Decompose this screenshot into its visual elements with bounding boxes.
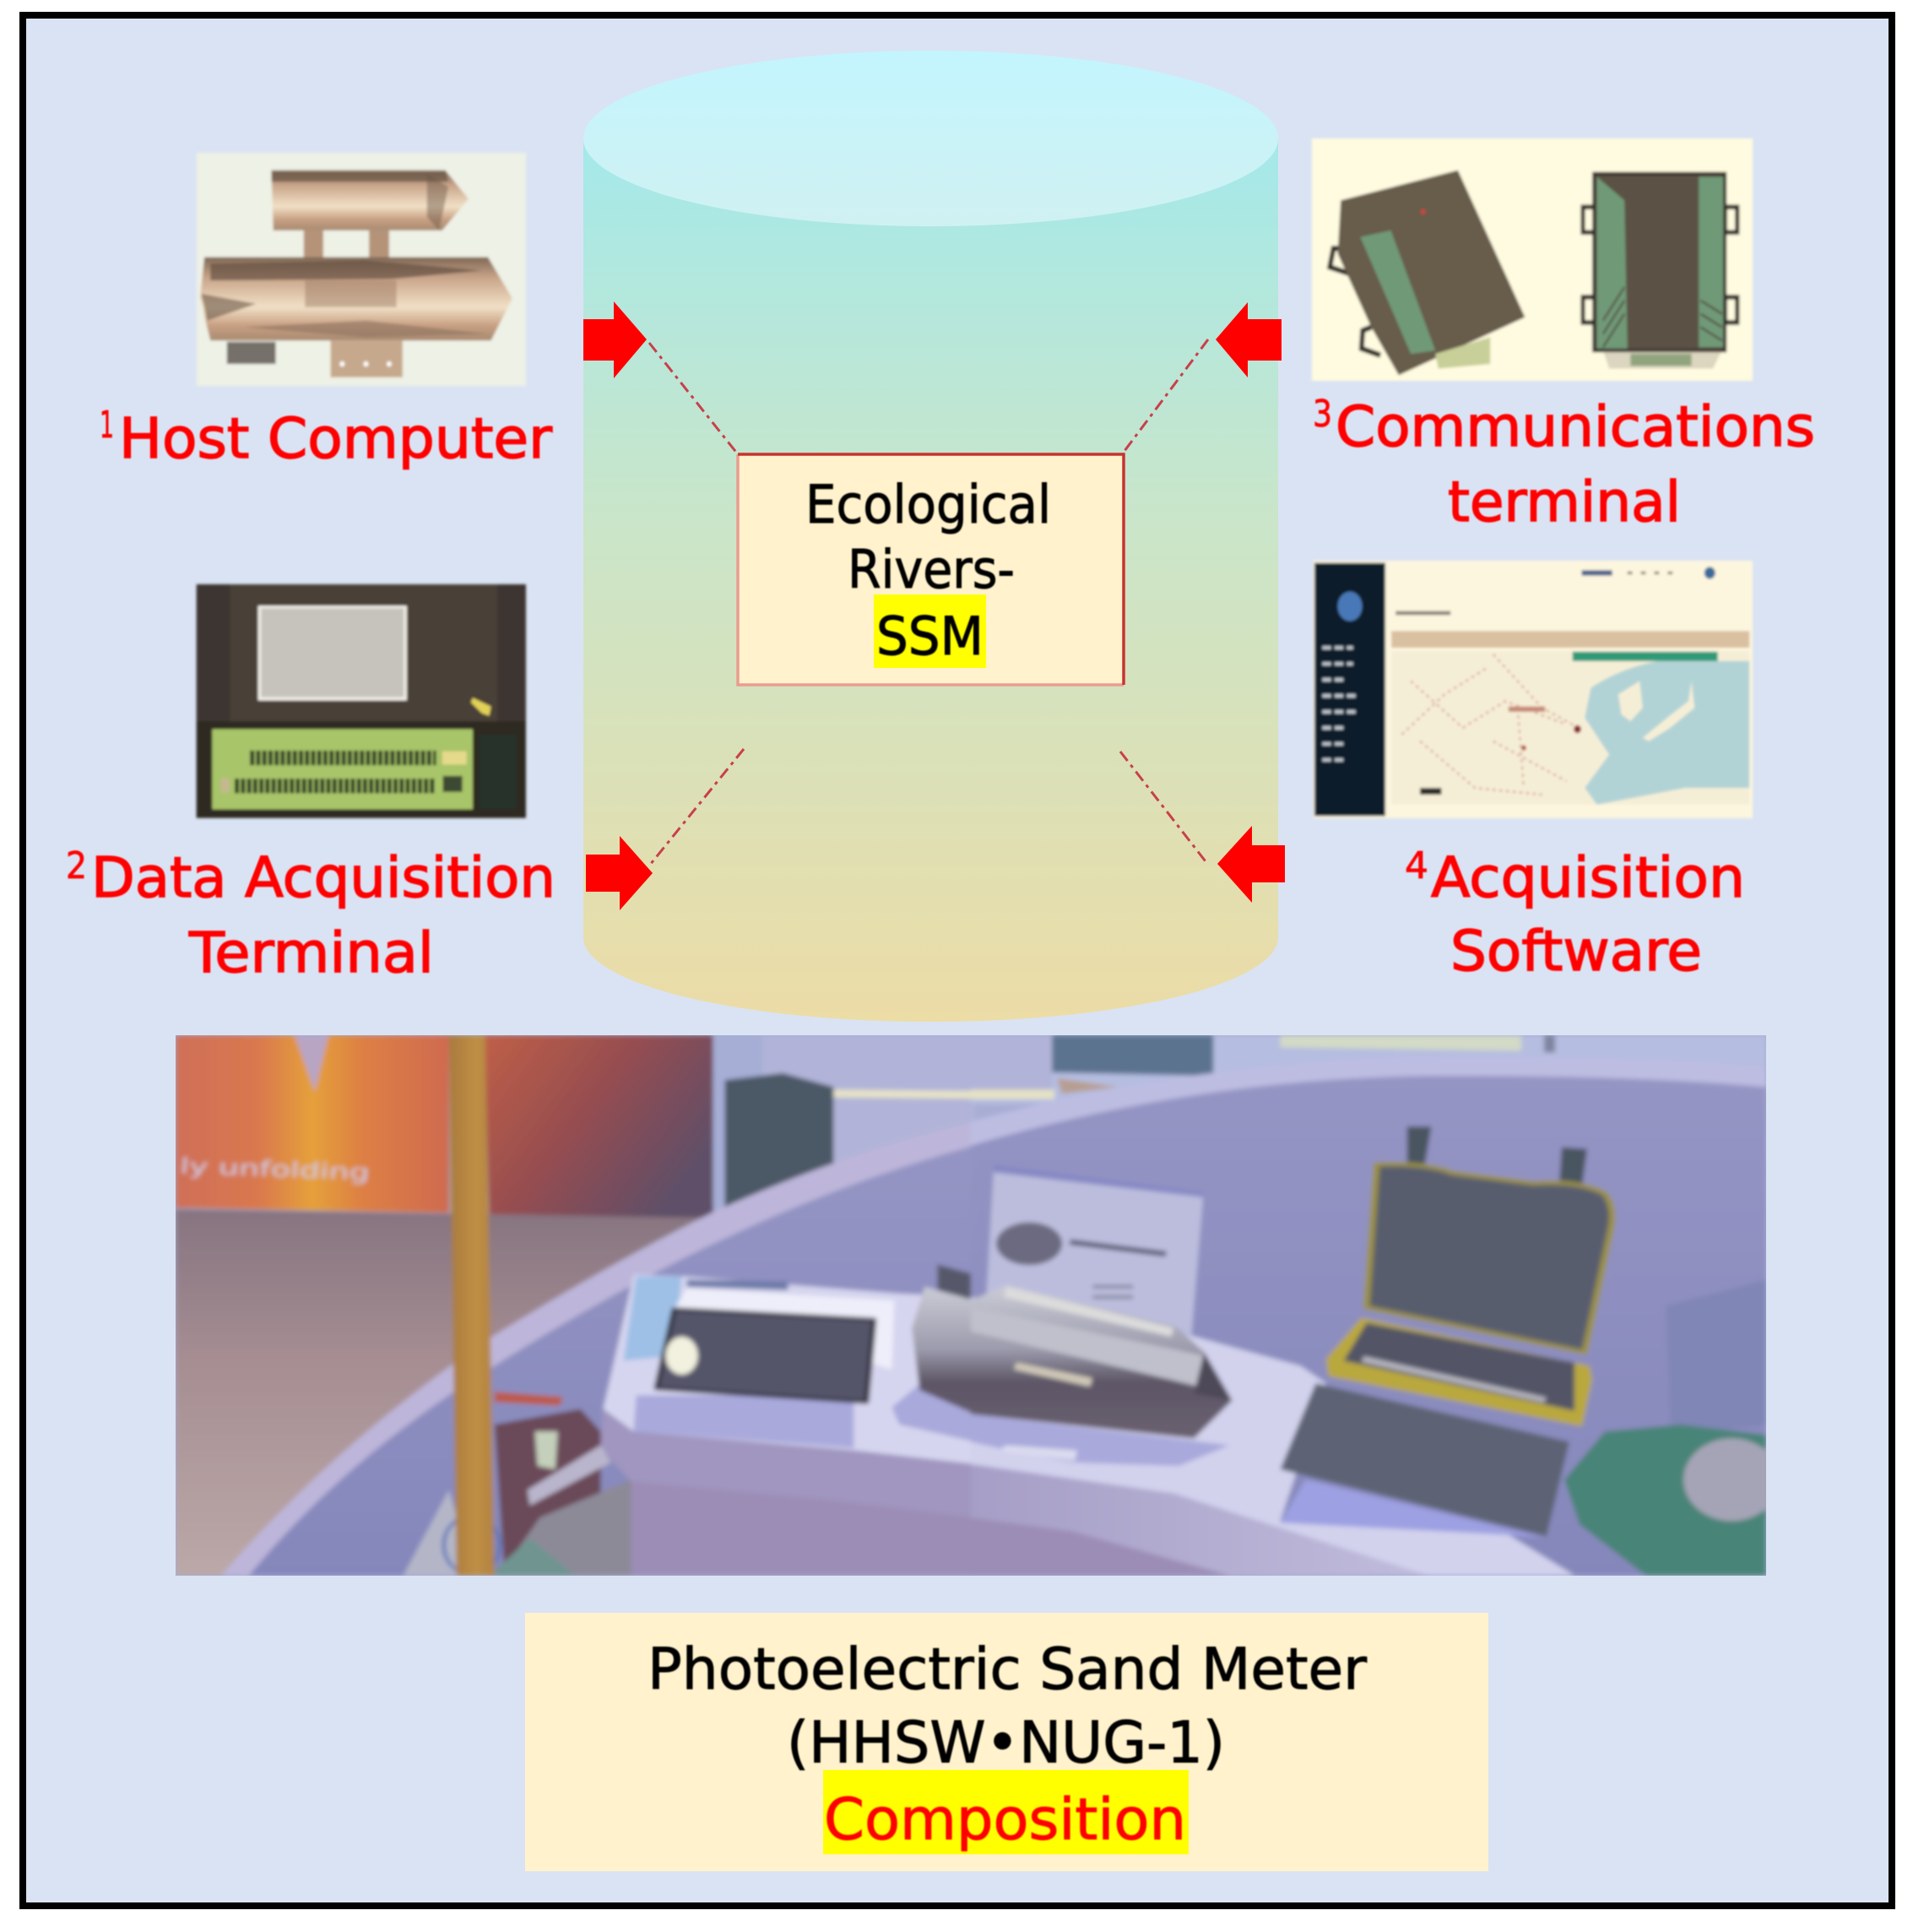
dashed connector lines xyxy=(649,339,1208,865)
arrow: software to cylinder xyxy=(1217,826,1285,903)
image: communications terminal xyxy=(1312,138,1753,381)
cylinder xyxy=(583,51,1278,1022)
label: host computer: Host Computer xyxy=(119,406,553,471)
label: acquisition software xyxy=(1405,844,1745,984)
label: data acquisition terminal: 2 xyxy=(66,844,87,887)
label: acquisition software: 4 xyxy=(1405,844,1428,887)
label: acquisition software: Acquisition xyxy=(1431,845,1745,910)
center box: Ecological Rivers-SSM: SSM xyxy=(876,605,984,667)
label: data acquisition terminal xyxy=(66,844,555,985)
label: communications terminal: Communications xyxy=(1336,394,1815,459)
label: communications terminal: 3 xyxy=(1313,393,1332,436)
center box: Ecological Rivers-SSM: Ecological xyxy=(805,474,1051,535)
right half of the photo xyxy=(971,1035,1780,1576)
arrow: data terminal to cylinder xyxy=(586,836,653,910)
label: data acquisition terminal: Terminal xyxy=(188,920,434,985)
label: acquisition software: Software xyxy=(1450,919,1702,984)
label: host computer: 1 xyxy=(100,404,114,447)
left half of the photo xyxy=(176,1035,975,1576)
caption box: Photoelectric Sand Meter composition xyxy=(525,1613,1488,1871)
arrow: host computer to cylinder xyxy=(583,301,647,378)
caption box: Photoelectric Sand Meter composition: Photoelectric Sand Meter xyxy=(648,1636,1367,1703)
label: communications terminal: terminal xyxy=(1448,469,1681,535)
image: acquisition software xyxy=(1314,561,1753,818)
center box: Ecological Rivers-SSM: Rivers- xyxy=(848,539,1015,600)
caption box: Photoelectric Sand Meter composition: (HHSW•NUG-1) xyxy=(787,1710,1225,1777)
image: data acquisition terminal xyxy=(197,584,526,818)
photo: exhibition display xyxy=(176,1035,1780,1576)
left half of the photo: ly unfolding xyxy=(179,1153,371,1186)
label: data acquisition terminal: Data Acquisition xyxy=(91,845,555,910)
caption box: Photoelectric Sand Meter composition: Composition xyxy=(824,1787,1186,1853)
center box: Ecological Rivers-SSM xyxy=(738,454,1124,685)
arrow: communications terminal to cylinder xyxy=(1216,302,1282,377)
label: communications terminal xyxy=(1313,393,1815,535)
image: host computer xyxy=(197,153,526,386)
